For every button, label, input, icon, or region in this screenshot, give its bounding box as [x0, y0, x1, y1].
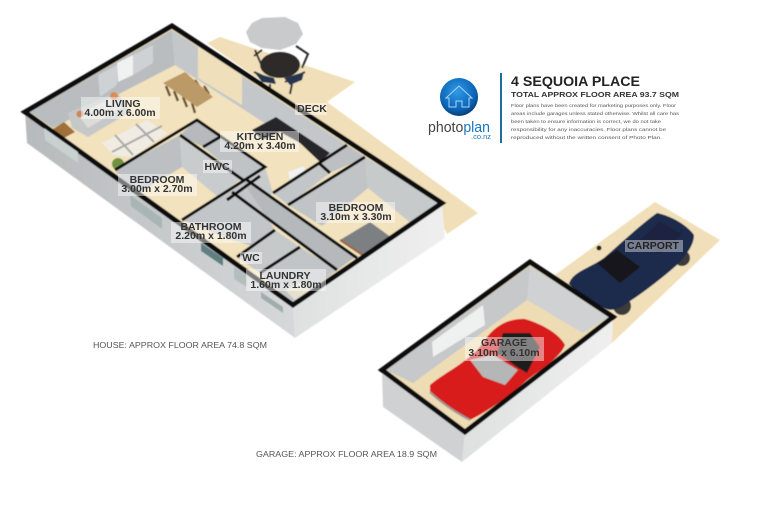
room label: garage	[465, 337, 544, 361]
laundry	[260, 247, 337, 305]
exterior walls	[25, 112, 445, 338]
room label: bathroom: 2.20m x 1.80m	[175, 230, 247, 242]
bedroom one wall faces	[115, 135, 242, 197]
room label: wc: WC	[242, 252, 260, 264]
garage floor	[382, 262, 613, 432]
disclaimer: Floor plans have been created for marketing purposes only. Floor	[511, 103, 676, 109]
garage exterior walls	[382, 317, 613, 462]
room label: bedroom two	[316, 202, 395, 223]
logo domain: .co.nz	[471, 132, 491, 141]
room label: laundry: LAUNDRY	[260, 270, 310, 282]
dining table	[163, 72, 213, 113]
caption: house area: HOUSE: APPROX FLOOR AREA 74.8 SQM	[93, 340, 267, 350]
disclaimer: been taken to ensure information is correct, we do not take	[511, 119, 661, 125]
cupboard, hot water cylinder and kitchen partition	[180, 120, 273, 200]
caption: garage area: GARAGE: APPROX FLOOR AREA 18.9 SQM	[256, 449, 437, 459]
floor	[25, 26, 442, 305]
room label: bathroom	[171, 221, 251, 243]
red car	[430, 319, 565, 420]
room label: kitchen	[220, 131, 299, 152]
divider	[500, 73, 502, 143]
room label: bathroom: BATHROOM	[180, 221, 242, 233]
room label: carport: CARPORT	[627, 240, 680, 252]
room label: bedroom one	[118, 174, 197, 196]
room label: laundry	[246, 269, 326, 291]
bathroom	[182, 182, 275, 246]
deck table and umbrella	[246, 17, 308, 94]
sofa	[53, 92, 130, 138]
photoplan logo	[428, 78, 491, 141]
room label: living: LIVING	[105, 98, 141, 110]
disclaimer: responsibility for any inaccuracies. Floor plans cannot be	[511, 127, 666, 133]
room label: bedroom two: 3.10m x 3.30m	[320, 211, 392, 223]
room label: hwc: HWC	[204, 161, 230, 173]
room label: living	[81, 97, 160, 119]
garage	[382, 262, 613, 462]
carport	[555, 202, 720, 343]
disclaimer: areas include garages unless stated otherwise. Whilst all care has	[511, 111, 680, 117]
bed	[340, 222, 392, 256]
rug	[102, 120, 167, 157]
bedroom two wall faces	[273, 145, 442, 226]
kitchen bench	[252, 117, 330, 162]
room label: deck: DECK	[297, 103, 327, 115]
living and kitchen wall faces	[30, 30, 347, 160]
exterior windows	[44, 128, 283, 313]
room label: garage: GARAGE	[481, 337, 527, 349]
total floor area: TOTAL APPROX FLOOR AREA 93.7 SQM	[511, 90, 679, 99]
room label: bedroom two: BEDROOM	[329, 202, 384, 214]
icon: house in blue globe	[440, 78, 478, 116]
blue car	[569, 213, 694, 315]
logo wordmark: photoplan	[428, 120, 490, 136]
room label: laundry: 1.60m x 1.80m	[250, 279, 322, 291]
property title: 4 SEQUOIA PLACE	[511, 74, 640, 89]
disclaimer: reproduced without the written consent of Photo Plan.	[511, 135, 662, 141]
plant	[112, 158, 124, 170]
disclaimer	[511, 103, 680, 141]
room label: kitchen: 4.20m x 3.40m	[224, 140, 296, 152]
walls	[25, 26, 442, 305]
hallway strip	[232, 180, 357, 270]
garage wall faces	[386, 266, 609, 383]
room label: garage: 3.10m x 6.10m	[468, 347, 540, 359]
room label: bedroom one: 3.00m x 2.70m	[121, 183, 193, 195]
room label: kitchen: KITCHEN	[237, 131, 283, 143]
house floor plan	[25, 17, 478, 338]
garage walls	[382, 262, 613, 432]
room label: living: 4.00m x 6.00m	[84, 107, 156, 119]
deck	[207, 37, 478, 234]
room label: bedroom one: BEDROOM	[130, 174, 185, 186]
wc	[237, 230, 300, 273]
carport floor	[555, 202, 720, 343]
